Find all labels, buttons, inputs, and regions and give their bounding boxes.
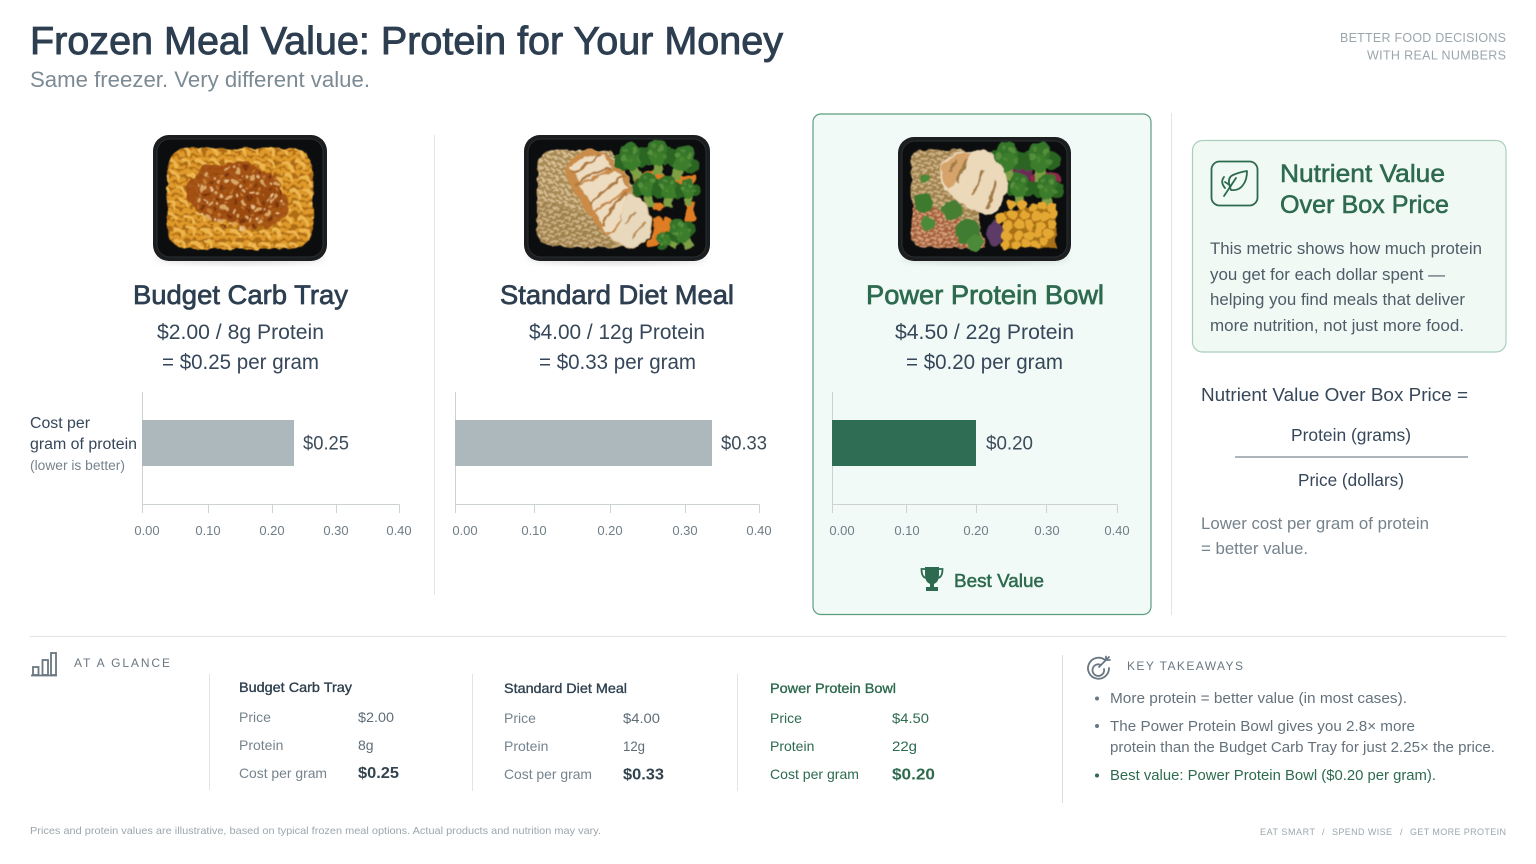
bar chart: budget: 0.10	[195, 523, 221, 538]
footnote: Prices and protein values are illustrative, based on typical frozen meal options. Actual products and nutrition may vary.	[30, 825, 601, 837]
panel: power protein bowl	[813, 114, 1151, 614]
table: budget carb tray: 8g	[358, 737, 374, 753]
icon: leaf	[1212, 162, 1258, 206]
header	[30, 20, 783, 92]
bar chart: power: 0.40	[1104, 523, 1130, 538]
footer tagline: EAT SMART	[1260, 827, 1316, 837]
food image: macaroni tray	[153, 135, 327, 264]
table: power protein bowl: Protein	[770, 738, 814, 754]
section label: KEY TAKEAWAYS	[1127, 659, 1243, 673]
bar chart: power: 0.10	[894, 523, 920, 538]
bar chart: budget: 0.00	[134, 523, 160, 538]
bar chart: standard	[452, 392, 772, 538]
card heading: Nutrient Value	[1280, 160, 1445, 188]
takeaway 2: The Power Protein Bowl gives you 2.8× more	[1110, 718, 1415, 735]
section: at a glance	[31, 653, 935, 791]
card heading: Over Box Price	[1280, 191, 1449, 219]
bar chart: budget	[134, 392, 412, 538]
table: standard diet meal: $0.33	[623, 766, 664, 784]
section label: AT A GLANCE	[74, 656, 170, 670]
table: power protein bowl: Power Protein Bowl	[770, 680, 896, 696]
table: power protein bowl: Price	[770, 710, 802, 726]
table: standard diet meal: Protein	[504, 738, 548, 754]
formula note	[1201, 514, 1429, 558]
table: standard diet meal: Standard Diet Meal	[504, 680, 627, 696]
takeaway 1: More protein = better value (in most cases).	[1110, 690, 1407, 707]
bar chart: standard: 0.20	[597, 523, 623, 538]
cost per gram: = $0.33 per gram	[539, 351, 696, 374]
takeaway 2: protein than the Budget Carb Tray for just 2.25× the price.	[1110, 739, 1495, 756]
table: budget carb tray: Price	[239, 709, 271, 725]
panel: nutrient value explainer	[1192, 140, 1506, 558]
bar chart: standard: 0.30	[672, 523, 698, 538]
bar chart: power: 0.00	[829, 523, 855, 538]
bar chart: standard: 0.40	[746, 523, 772, 538]
title: Frozen Meal Value: Protein for Your Money	[30, 20, 783, 63]
card body text: you get for each dollar spent —	[1210, 265, 1445, 284]
subtitle: Same freezer. Very different value.	[30, 67, 370, 92]
card body text: This metric shows how much protein	[1210, 239, 1482, 258]
card body text	[1210, 239, 1482, 335]
card body text: helping you find meals that deliver	[1210, 290, 1465, 309]
bar chart: budget: 0.40	[386, 523, 412, 538]
meal name: Standard Diet Meal	[500, 280, 734, 310]
tagline: WITH REAL NUMBERS	[1367, 48, 1506, 62]
bar chart: standard: 0.00	[452, 523, 478, 538]
panel: standard diet meal	[452, 135, 772, 538]
icon: bar chart	[31, 653, 57, 676]
tagline	[1340, 31, 1506, 62]
formula: Nutrient Value Over Box Price =	[1201, 384, 1468, 405]
price and protein: $4.00 / 12g Protein	[529, 321, 705, 344]
table: power protein bowl: 22g	[892, 738, 917, 754]
bar chart: power	[829, 392, 1130, 538]
formula: Price (dollars)	[1298, 470, 1404, 490]
table: standard diet meal	[504, 680, 664, 784]
meal name: Power Protein Bowl	[866, 280, 1104, 310]
bar chart: power: 0.30	[1034, 523, 1060, 538]
meal name: Budget Carb Tray	[133, 280, 348, 310]
axis label: (lower is better)	[30, 458, 125, 473]
bar chart: power: $0.20	[986, 434, 1033, 454]
table: budget carb tray: $2.00	[358, 709, 394, 725]
food image: chicken, rice and vegetables tray	[524, 135, 710, 264]
table: standard diet meal: Price	[504, 710, 536, 726]
footer tagline: /	[1322, 827, 1325, 837]
explainer card	[1192, 140, 1506, 352]
bar chart: budget: 0.20	[259, 523, 285, 538]
section: key takeaways	[1088, 656, 1495, 784]
highlighted card	[813, 114, 1151, 614]
bar chart: standard: $0.33	[721, 434, 767, 454]
axis label	[30, 415, 137, 473]
footer tagline: SPEND WISE	[1332, 827, 1392, 837]
table: power protein bowl: Cost per gram	[770, 766, 859, 782]
table: standard diet meal: Cost per gram	[504, 766, 592, 782]
tagline: BETTER FOOD DECISIONS	[1340, 31, 1506, 45]
footer tagline: /	[1400, 827, 1403, 837]
table: budget carb tray	[239, 679, 399, 782]
panel: budget carb tray	[30, 135, 412, 538]
takeaway 2	[1095, 718, 1495, 756]
table: budget carb tray: $0.25	[358, 765, 399, 782]
table: standard diet meal: $4.00	[623, 710, 660, 726]
icon: target	[1088, 656, 1110, 679]
bar chart: budget: 0.30	[323, 523, 349, 538]
table: power protein bowl: $0.20	[892, 766, 935, 784]
food image: protein bowl tray	[898, 137, 1071, 264]
formula: Protein (grams)	[1291, 425, 1411, 445]
bar chart: power: 0.20	[963, 523, 989, 538]
card heading	[1280, 160, 1449, 219]
table: power protein bowl: $4.50	[892, 710, 929, 726]
footer tagline	[1260, 827, 1506, 837]
bar chart: standard: 0.10	[521, 523, 547, 538]
formula	[1201, 384, 1468, 490]
best value badge: Best Value	[954, 570, 1044, 591]
table: budget carb tray: Protein	[239, 737, 283, 753]
table: budget carb tray: Budget Carb Tray	[239, 679, 352, 695]
formula note: = better value.	[1201, 539, 1308, 558]
price and protein: $4.50 / 22g Protein	[895, 321, 1074, 344]
footer tagline: GET MORE PROTEIN	[1410, 827, 1506, 837]
icon: trophy	[922, 567, 942, 591]
table: budget carb tray: Cost per gram	[239, 765, 327, 781]
takeaway 3: Best value: Power Protein Bowl ($0.20 per gram).	[1110, 767, 1436, 784]
axis label: Cost per	[30, 415, 90, 432]
cost per gram: = $0.25 per gram	[162, 351, 319, 374]
formula note: Lower cost per gram of protein	[1201, 514, 1429, 533]
cost per gram: = $0.20 per gram	[906, 351, 1063, 374]
axis label: gram of protein	[30, 436, 137, 453]
table: standard diet meal: 12g	[623, 738, 645, 754]
price and protein: $2.00 / 8g Protein	[157, 321, 324, 344]
bar chart: budget: $0.25	[303, 434, 349, 454]
table: power protein bowl	[770, 680, 935, 784]
card body text: more nutrition, not just more food.	[1210, 316, 1464, 335]
